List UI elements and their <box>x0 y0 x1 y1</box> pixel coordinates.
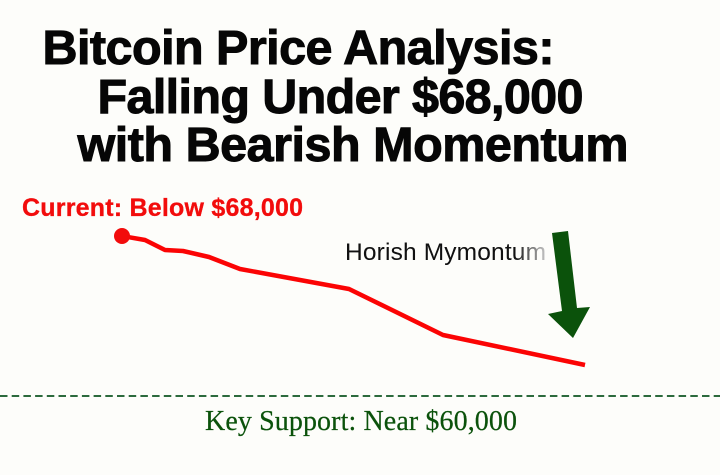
title: with Bearish Momentum <box>76 118 628 172</box>
support label: Key Support: Near $60,000 <box>205 406 517 437</box>
momentum label: Horish Mymontum <box>345 239 546 266</box>
price line chart <box>114 228 585 365</box>
title: Falling Under $68,000 <box>98 70 584 124</box>
icon: downward arrow <box>548 231 590 338</box>
support level dashed line <box>0 395 720 397</box>
current price label: Current: Below $68,000 <box>22 194 303 222</box>
title: Bitcoin Price Analysis: <box>42 21 554 75</box>
title <box>42 21 628 172</box>
